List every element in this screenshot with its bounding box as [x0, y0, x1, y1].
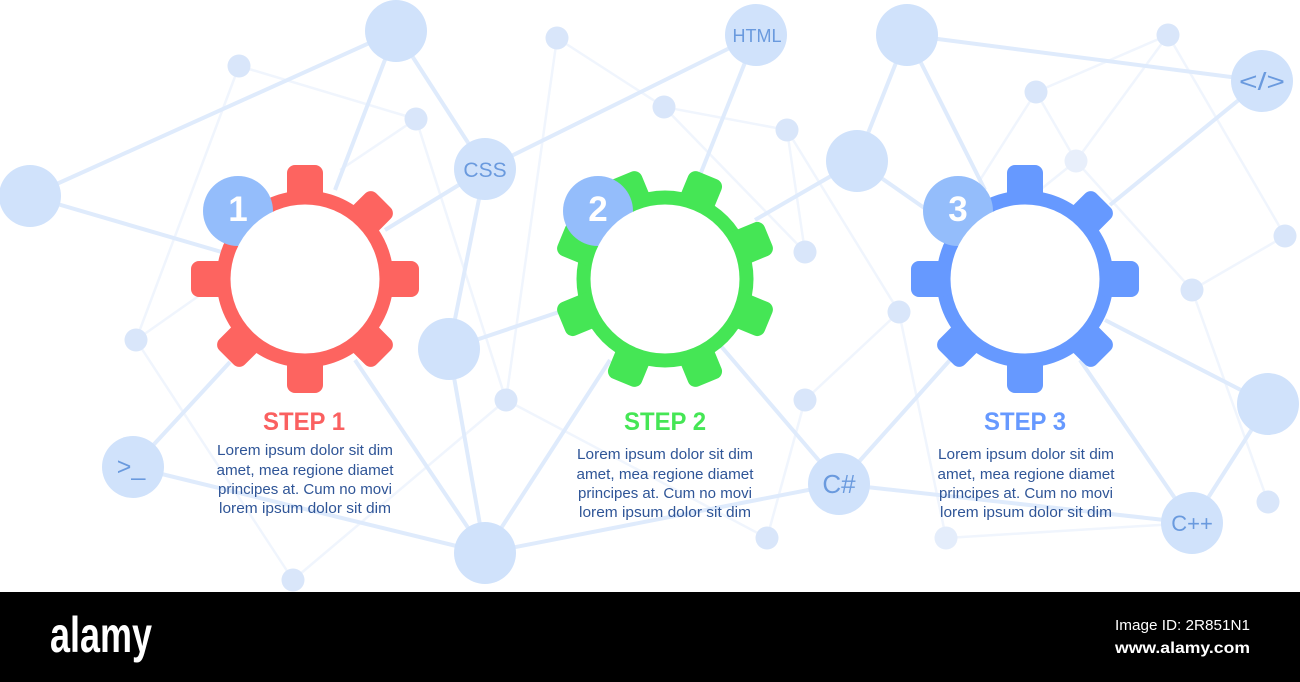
step 1 body text: amet, mea regione diamet — [216, 462, 394, 479]
node: CSS: CSS — [463, 159, 507, 182]
node: C# — [808, 453, 870, 515]
step 3 gear centre — [950, 204, 1100, 354]
step 1 gear centre — [230, 204, 380, 354]
step 2 body text: Lorem ipsum dolor sit dim — [577, 446, 753, 463]
step 3 number badge: 3 — [948, 190, 968, 229]
alamy logo: alamy — [50, 607, 152, 663]
step 1 body text: Lorem ipsum dolor sit dim — [217, 442, 393, 459]
node: terminal prompt: >_ — [117, 453, 146, 481]
step 1 gear — [191, 165, 419, 393]
node: C++: C++ — [1171, 511, 1213, 536]
step 3 body text: principes at. Cum no movi — [939, 485, 1113, 502]
step 2 heading: STEP 2 — [624, 408, 706, 436]
step 1 number badge: 1 — [228, 190, 248, 229]
step 2 body text — [576, 446, 754, 521]
step 2 number badge: 2 — [588, 190, 608, 229]
step 1 body text — [216, 442, 394, 517]
step 2 body text: lorem ipsum dolor sit dim — [579, 504, 751, 521]
node: CSS — [454, 138, 516, 200]
node: HTML: HTML — [732, 26, 782, 46]
step 3 body text: Lorem ipsum dolor sit dim — [938, 446, 1114, 463]
node: C++ — [1161, 492, 1223, 554]
image id: Image ID: 2R851N1 — [1115, 617, 1250, 634]
network nodes: small — [124, 24, 1296, 592]
node: closing tag: </> — [1239, 68, 1285, 96]
step 3 gear — [911, 165, 1139, 393]
step 3 body text — [938, 446, 1115, 521]
step 3 number badge — [923, 176, 993, 246]
step 2 gear — [555, 169, 775, 389]
step 1 body text: principes at. Cum no movi — [218, 481, 392, 498]
node: HTML — [725, 4, 787, 66]
step 3 heading: STEP 3 — [984, 408, 1066, 436]
step 3 body text: lorem ipsum dolor sit dim — [940, 504, 1112, 521]
step 3 body text: amet, mea regione diamet — [938, 466, 1115, 483]
website: www.alamy.com — [1114, 640, 1250, 657]
step 2 gear centre — [590, 204, 740, 354]
step 1 heading: STEP 1 — [263, 408, 345, 436]
node: closing tag — [1231, 50, 1293, 112]
step 2 body text: principes at. Cum no movi — [578, 485, 752, 502]
node: C#: C# — [822, 469, 856, 499]
node: terminal prompt — [102, 436, 164, 498]
step 1 number badge — [203, 176, 273, 246]
step 2 number badge — [563, 176, 633, 246]
step 1 body text: lorem ipsum dolor sit dim — [219, 500, 391, 517]
step 2 body text: amet, mea regione diamet — [576, 466, 754, 483]
footer bar — [0, 592, 1300, 682]
